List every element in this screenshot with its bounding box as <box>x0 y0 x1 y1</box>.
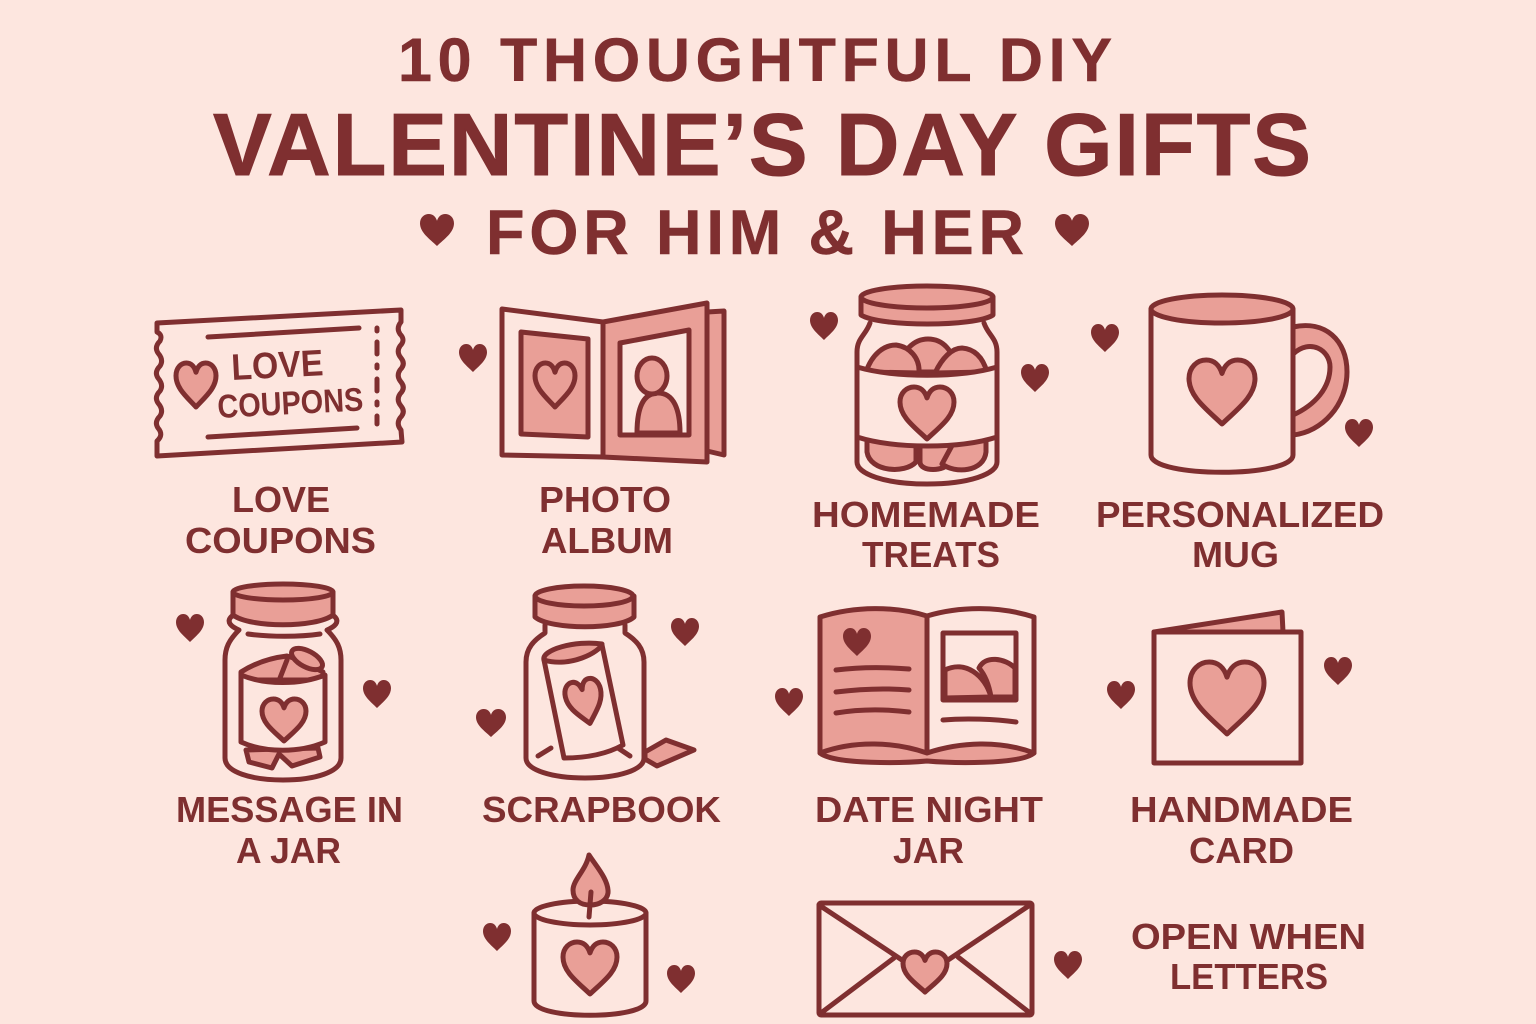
title line 3: FOR HIM & HER <box>486 198 1024 268</box>
icon: coupon ticket: COUPONS <box>216 380 364 425</box>
icon: coupon ticket <box>156 310 403 456</box>
label: open when letters: OPEN WHEN <box>1131 916 1366 957</box>
item: date night jar <box>815 609 1043 871</box>
label: message in a jar: MESSAGE IN <box>176 789 403 830</box>
label: open when letters: LETTERS <box>1170 956 1328 997</box>
item: scrapbook <box>482 586 721 830</box>
label: personalized mug: MUG <box>1192 534 1279 575</box>
item: homemade treats <box>812 286 1040 575</box>
label: photo album: PHOTO <box>539 479 671 520</box>
item: handmade card <box>1130 612 1353 871</box>
label: handmade card: CARD <box>1189 830 1294 871</box>
title <box>213 26 1311 268</box>
item: photo album <box>502 303 724 561</box>
item: open when letters <box>819 903 1366 1015</box>
label: personalized mug: PERSONALIZED <box>1096 494 1384 535</box>
label: photo album: ALBUM <box>541 520 673 561</box>
icon: title heart right <box>1055 214 1089 246</box>
label: open when letters <box>1131 916 1366 997</box>
icon: greeting card <box>1154 612 1301 763</box>
icon: candle <box>534 855 646 1015</box>
icon: mug <box>1151 295 1347 472</box>
label: homemade treats: HOMEMADE <box>812 494 1040 535</box>
label: homemade treats: TREATS <box>862 534 1000 575</box>
title line 1: 10 THOUGHTFUL DIY <box>398 26 1112 94</box>
label: date night jar: JAR <box>893 830 964 871</box>
icon: envelope <box>819 903 1032 1015</box>
icon: coupon ticket: LOVE <box>230 342 324 388</box>
icon: scrapbook jar <box>526 586 694 778</box>
label: personalized mug <box>1096 494 1384 575</box>
label: date night jar <box>815 789 1043 871</box>
label: love coupons: COUPONS <box>185 520 376 561</box>
icon: photo album <box>502 303 724 462</box>
label: love coupons <box>185 479 376 561</box>
label: message in a jar <box>176 789 403 871</box>
label: love coupons: LOVE <box>232 479 330 520</box>
label: message in a jar: A JAR <box>236 830 341 871</box>
title line 2: VALENTINE’S DAY GIFTS <box>213 95 1311 194</box>
label: date night jar: DATE NIGHT <box>815 789 1043 830</box>
label: photo album <box>539 479 673 561</box>
icon: open book <box>820 609 1034 763</box>
item: message in a jar <box>176 584 403 871</box>
item: love coupons <box>156 310 403 561</box>
label: handmade card <box>1130 789 1353 871</box>
icon: message jar <box>225 584 341 780</box>
icon: title heart left <box>420 214 454 246</box>
icon: treat jar <box>857 286 997 484</box>
label: handmade card: HANDMADE <box>1130 789 1353 830</box>
decorative small hearts <box>176 312 1373 993</box>
item: personalized mug <box>1096 295 1384 575</box>
label: homemade treats <box>812 494 1040 575</box>
label: scrapbook: SCRAPBOOK <box>482 789 721 830</box>
